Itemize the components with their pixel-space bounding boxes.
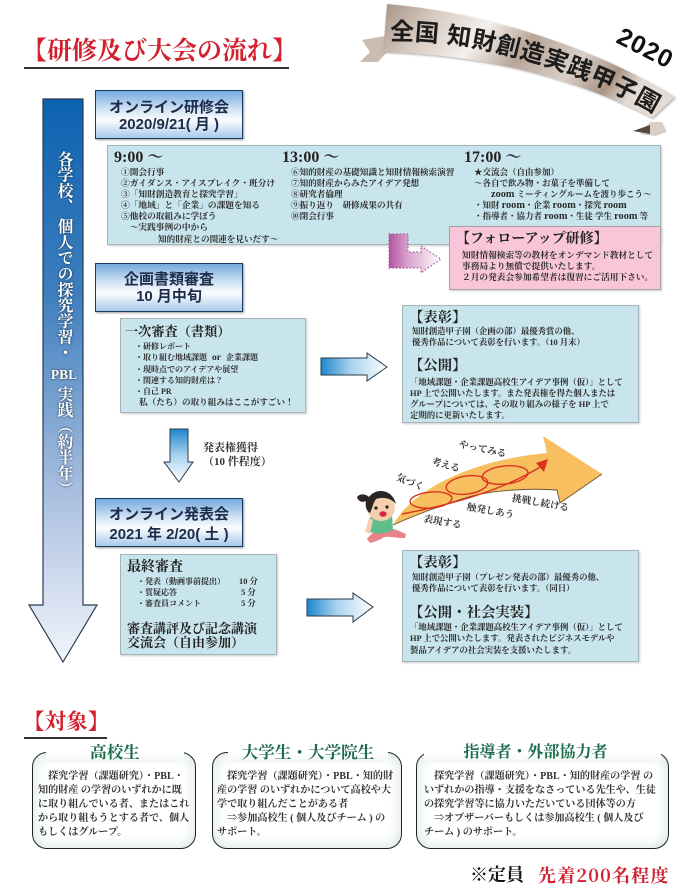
schedule morning: 知的財産との関連を見いだす～ <box>158 234 278 244</box>
capacity note <box>470 862 670 888</box>
panel: awards and social implementation, final round: HP 上で公開いたします。発表されたビジネスモデルや <box>410 634 615 643</box>
panel: final screening: 審査講評及び記念講演 <box>127 621 257 636</box>
panel: first screening: ・取り組む地域課題 or 企業課題 <box>135 353 258 363</box>
arrow: down to online presentation <box>163 428 194 483</box>
panel: awards and publication, first round: グループについては、その取り組みの様子を HP 上で <box>410 400 609 409</box>
arrow keyword labels <box>395 438 570 531</box>
panel: follow-up training: 事務局より無償で提供いたします。 <box>462 261 600 271</box>
arrow: final screening to awards <box>306 592 374 623</box>
banner: national contest name ribbon: 2020 <box>612 22 678 74</box>
header: online presentation: 2021 年 2/20( 土 ) <box>109 526 229 543</box>
arrow: to follow-up training <box>388 233 441 273</box>
vertical arrow text: 各学校、 個人での探究学習・ <box>55 151 72 360</box>
card: university and graduate students <box>212 752 402 849</box>
long process arrow: half-year inquiry and PBL <box>28 98 98 663</box>
panel: awards and social implementation, final round: 【表彰】 <box>409 555 467 571</box>
hair <box>357 491 396 513</box>
schedule morning: ④「地域」と「企業」の課題を知る <box>121 200 260 210</box>
schedule afternoon: ⑧研究者倫理 <box>291 189 343 199</box>
card title <box>46 744 184 762</box>
header: online presentation <box>95 498 243 547</box>
schedule afternoon <box>282 149 454 221</box>
panel: final screening <box>120 554 277 655</box>
legs <box>367 528 406 543</box>
face <box>367 495 395 521</box>
panel: first screening: ・現時点でのアイデアや展望 <box>135 365 238 374</box>
header: document review <box>95 263 243 312</box>
panel: awards and social implementation, final round <box>402 550 639 662</box>
card text: 探究学習（課題研究）・PBL・知的財産の学習 の いずれかの指導・支援をなさっている先生や、生徒 の探究学習等に協力いただいている団体等の方 ⇒オブザーバーもしくは参加高校生 ( 個人及び チーム ) のサポート。 <box>424 771 656 838</box>
arrow keyword labels: 触発しあう <box>466 501 515 521</box>
vertical arrow text: PBL <box>51 367 77 382</box>
panel: final screening: 10 分 <box>239 577 258 586</box>
header: online training <box>95 90 243 139</box>
header: document review: 10 月中旬 <box>136 288 202 305</box>
schedule evening: ～各自で飲み物・お菓子を準備して <box>474 178 610 188</box>
panel: first screening <box>120 318 306 413</box>
panel: final screening: 5 分 <box>241 588 256 597</box>
schedule morning: ⑤他校の取組みに学ぼう <box>121 211 217 221</box>
vertical arrow text: 実践（約半年） <box>55 386 72 497</box>
card: high school students <box>32 752 196 849</box>
growth arrow <box>393 436 602 525</box>
title: training and tournament flow: 【研修及び大会の流れ】 <box>22 38 297 65</box>
schedule afternoon: 13:00 ～ <box>282 149 339 166</box>
arrow keyword labels: 考える <box>430 456 461 475</box>
panel: follow-up training <box>449 226 661 290</box>
red loop trail <box>402 464 545 514</box>
panel: training schedule <box>107 145 661 245</box>
card text: 探究学習（課題研究）・PBL・ 知的財産 の学習のいずれかに既 に取り組んでいる者、またはこれ から取り組もうとする者で、個人 もしくはグループ。 <box>38 771 189 838</box>
header: online presentation: オンライン発表会 <box>109 506 229 523</box>
heading: target participants: 【対象】 <box>23 710 109 734</box>
banner: national contest name ribbon: 全国 知財創造実践甲子園 <box>390 19 662 114</box>
panel: awards and publication, first round: HP 上で公開いたします。また発表権を得た個人または <box>410 389 615 398</box>
arrow: first screening to awards <box>320 352 388 382</box>
card: instructors and external collaborators <box>416 752 669 849</box>
arm <box>365 518 373 534</box>
panel: awards and social implementation, final round: 【公開・社会実装】 <box>409 605 539 621</box>
shirt <box>369 515 393 533</box>
banner: national contest name ribbon <box>360 4 678 136</box>
card title: 高校生 <box>90 743 140 762</box>
schedule afternoon: ⑨振り返り 研修成果の共有 <box>291 200 403 210</box>
schedule evening: 17:00 ～ <box>464 149 521 166</box>
panel: final screening: 交流会（自由参加） <box>127 634 244 650</box>
panel: final screening: 5 分 <box>241 599 256 608</box>
girl <box>357 491 406 543</box>
panel: follow-up training: ２月の発表会参加希望者は復習にご活用下さい。 <box>462 272 653 282</box>
card title <box>424 744 661 762</box>
card title: 指導者・外部協力者 <box>463 744 608 761</box>
schedule evening: zoom ミーティングルームを渡り歩こう～ <box>491 189 652 200</box>
schedule morning: ～実践事例の中から <box>130 222 208 232</box>
panel: awards and social implementation, final round: 知財創造甲子園（プレゼン発表の部）最優秀の他、 <box>412 573 604 582</box>
label: presentation rights <box>203 442 272 468</box>
panel: first screening: 私（たち）の取り組みはここがすごい！ <box>139 397 294 407</box>
schedule evening <box>464 149 652 222</box>
panel: awards and social implementation, final round: 「地域課題・企業課題高校生アイデア事例（仮）」として <box>410 623 623 632</box>
header: online training: 2020/9/21( 月 ) <box>119 116 219 133</box>
card title: 大学生・大学院生 <box>242 743 374 762</box>
schedule morning <box>114 149 278 244</box>
schedule morning: ①開会行事 <box>121 167 164 177</box>
panel: final screening: ・審査員コメント <box>137 599 201 608</box>
illustration: girl running with growth arrow <box>357 436 602 543</box>
panel: final screening: ・発表（動画事前提出） <box>137 577 225 586</box>
schedule morning: ②ガイダンス・アイスブレイク・班分け <box>121 178 275 188</box>
schedule afternoon: ⑦知的財産からみたアイデア発想 <box>291 178 419 188</box>
panel: first screening: ・関連する知的財産は？ <box>135 376 223 385</box>
schedule morning: ③「知財創造教育と探究学習」 <box>121 189 243 199</box>
panel: first screening: ・自己 PR <box>135 387 172 396</box>
schedule afternoon: ⑩閉会行事 <box>291 211 334 221</box>
schedule morning: 9:00 ～ <box>114 149 163 166</box>
panel: follow-up training: 【フォローアップ研修】 <box>456 232 608 247</box>
panel: first screening: ・研修レポート <box>135 342 191 351</box>
panel: awards and publication, first round: 知財創造甲子園（企画の部）最優秀賞の他、 <box>412 327 580 336</box>
panel: final screening: 最終審査 <box>127 560 183 575</box>
card text: 探究学習（課題研究）・PBL・知的財 産の学習 のいずれかについて高校や大 学で取り組んだことがある者 ⇒参加高校生 ( 個人及びチーム ) の サポート。 <box>217 771 393 838</box>
vertical arrow text <box>50 150 78 497</box>
panel: awards and publication, first round: 定期的に更新いたします。 <box>410 411 510 420</box>
panel: awards and social implementation, final round: 製品アイデアの社会実装を支援いたします。 <box>410 646 576 655</box>
panel: follow-up training: 知財情報検索等の教材をオンデマンド教材として <box>462 250 653 260</box>
panel: awards and publication, first round: 【公開】 <box>409 358 467 374</box>
capacity note: 先着200名程度 <box>538 862 670 888</box>
panel: awards and publication, first round <box>402 305 639 423</box>
arrow keyword labels: やってみる <box>458 438 507 460</box>
arrow keyword labels: 挑戦し続ける <box>511 492 570 514</box>
schedule evening: ・知財 room・企業 room・探究 room <box>474 200 627 211</box>
panel: final screening: ・質疑応答 <box>137 588 177 597</box>
schedule afternoon: ⑥知的財産の基礎知識と知財情報検索演習 <box>291 167 454 177</box>
panel: awards and social implementation, final round: 優秀作品について表彰を行います。（同日） <box>412 584 574 593</box>
schedule evening: ★交流会（自由参加） <box>474 167 559 177</box>
panel: awards and publication, first round: 「地域課題・企業課題高校生アイデア事例（仮）」として <box>410 378 623 387</box>
label: presentation rights: 発表権獲得 <box>203 442 258 454</box>
arrow keyword labels: 表現する <box>423 513 462 531</box>
header: document review: 企画書類審査 <box>124 271 214 288</box>
schedule evening: ・指導者・協力者 room・生徒 学生 room 等 <box>474 211 648 222</box>
arrow keyword labels: 気づく <box>395 471 426 493</box>
panel: awards and publication, first round: 優秀作品について表彰を行います。（10 月末） <box>412 338 585 347</box>
label: presentation rights: （10 件程度） <box>203 456 272 468</box>
capacity note: ※定員 <box>470 865 524 885</box>
panel: first screening: 一次審査（書類） <box>125 324 230 339</box>
header: online training: オンライン研修会 <box>109 99 229 116</box>
panel: awards and publication, first round: 【表彰】 <box>409 310 467 326</box>
